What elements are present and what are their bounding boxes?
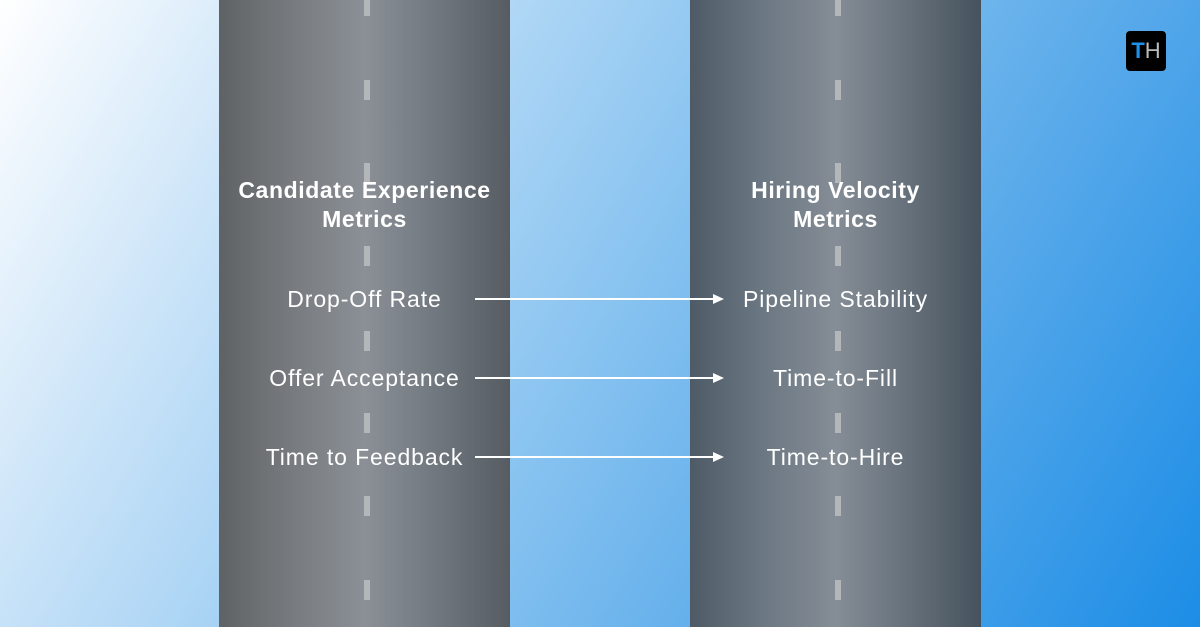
heading: hiring velocity	[751, 177, 920, 232]
text: drop-off rate: Drop-Off Rate	[287, 286, 442, 312]
text: pipeline stability: Pipeline Stability	[743, 286, 928, 312]
text: offer acceptance: Offer Acceptance	[269, 365, 460, 391]
heading: candidate experience: Metrics	[322, 206, 407, 232]
arrow 3	[475, 452, 724, 462]
logo: TH	[1131, 38, 1161, 63]
road: right	[690, 0, 981, 627]
text: time-to-fill: Time-to-Fill	[773, 365, 898, 391]
heading: candidate experience: Candidate Experience	[238, 177, 491, 203]
heading: candidate experience	[238, 177, 491, 232]
text: time-to-hire: Time-to-Hire	[767, 444, 904, 470]
road: left	[219, 0, 510, 627]
heading: hiring velocity: Metrics	[793, 206, 878, 232]
heading: hiring velocity: Hiring Velocity	[751, 177, 920, 203]
arrow 2	[475, 373, 724, 383]
text: time to feedback: Time to Feedback	[266, 444, 463, 470]
arrow 1	[475, 294, 724, 304]
logo	[1126, 31, 1166, 71]
